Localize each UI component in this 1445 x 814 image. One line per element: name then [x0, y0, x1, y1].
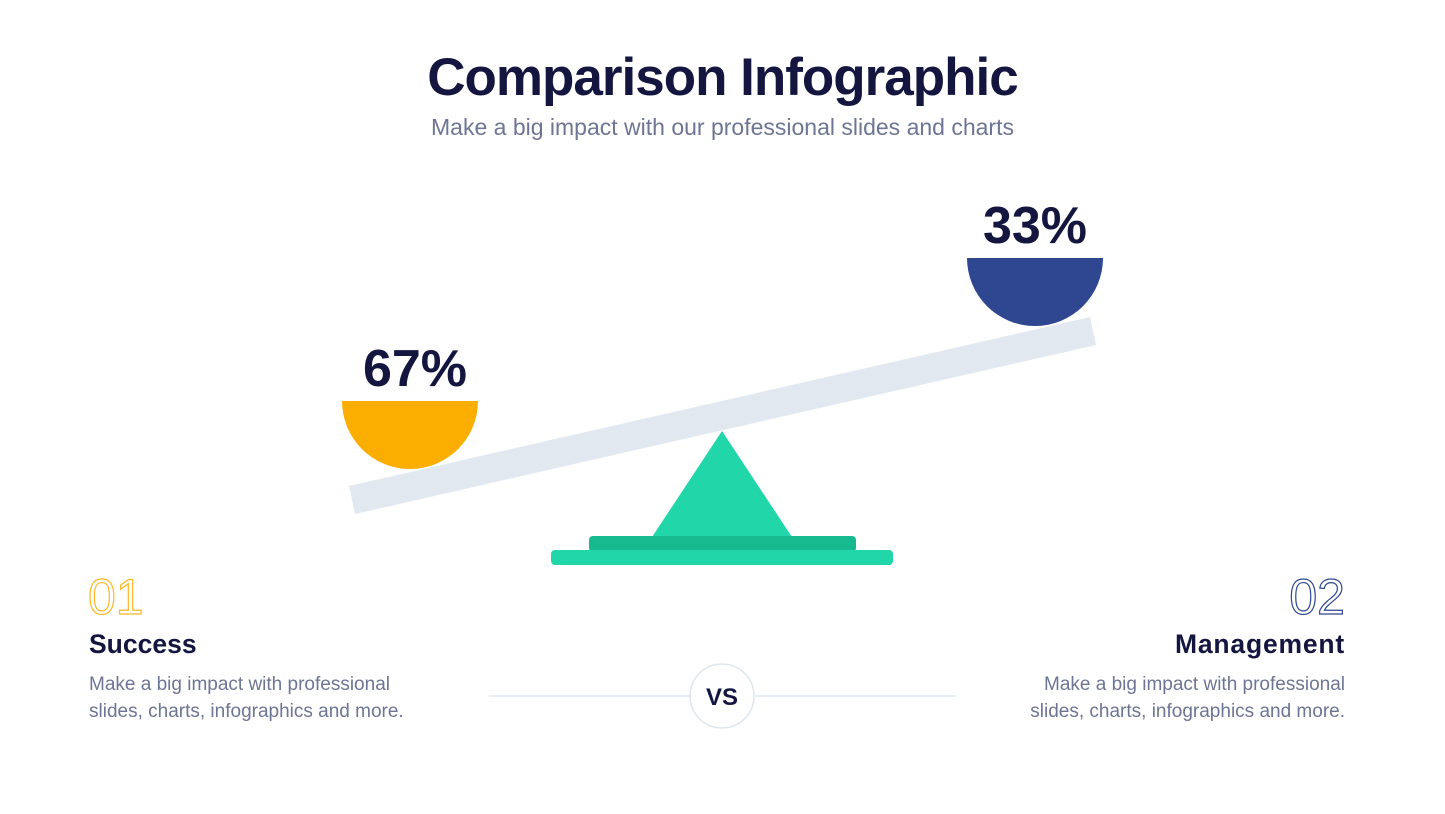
percent 67: 67%: [363, 340, 467, 398]
heading: management: Management: [1175, 629, 1345, 659]
text: success: Make a big impact with professional: [89, 674, 390, 695]
text: management: Make a big impact with professional: [1044, 674, 1345, 695]
bowl: blue: [967, 258, 1103, 326]
vs divider: VS: [706, 684, 738, 711]
panel: management: [1030, 629, 1345, 722]
vs divider: [489, 664, 956, 728]
text: management: slides, charts, infographics and more.: [1030, 701, 1345, 722]
percent 33: 33%: [983, 197, 1087, 255]
heading: success: Success: [89, 629, 197, 659]
panel: success: [89, 629, 404, 722]
bowl: orange: [342, 401, 478, 469]
text: success: slides, charts, infographics and more.: [89, 701, 404, 722]
beam: [349, 317, 1096, 514]
fulcrum: [551, 431, 893, 565]
text: management: [1030, 674, 1345, 722]
subtitle: Make a big impact with our professional slides and charts: [431, 114, 1014, 140]
text: success: [89, 674, 404, 722]
number 01: 01: [88, 569, 144, 625]
title: Comparison Infographic: [427, 48, 1018, 107]
number 02: 02: [1289, 569, 1345, 625]
